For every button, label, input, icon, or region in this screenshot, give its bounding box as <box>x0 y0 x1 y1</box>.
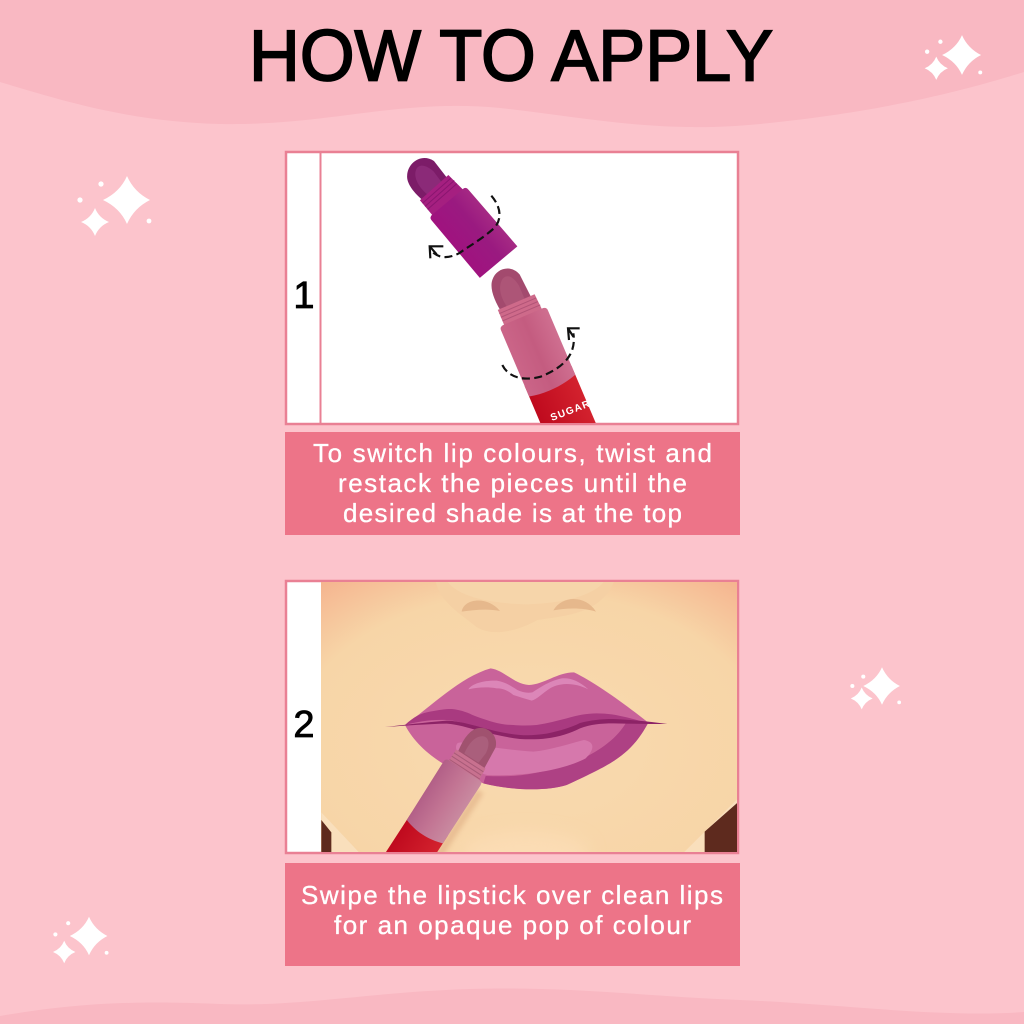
neck shadows <box>321 812 359 852</box>
arrow: top twist <box>430 196 500 258</box>
icon: sparkles right <box>850 667 901 709</box>
caption: step 2 <box>285 863 740 966</box>
step number 2: 2 <box>293 704 315 746</box>
lipstick in hand <box>386 728 496 852</box>
purple stacked piece <box>407 158 518 278</box>
step number 1: 1 <box>293 275 315 317</box>
icon: sparkles bottom left <box>53 917 109 963</box>
arrow: bottom twist <box>502 328 580 379</box>
rose stacked piece <box>492 268 596 423</box>
lips <box>385 668 667 789</box>
brand text on pencil: SUGAR <box>549 398 592 424</box>
caption: step 2: Swipe the lipstick over clean lips <box>301 880 723 910</box>
panel: step 1 <box>286 146 738 450</box>
title: HOW TO APPLY <box>249 16 773 96</box>
panel: step 2 <box>284 580 740 854</box>
illustration: lipstick pieces twisting <box>407 158 596 423</box>
bottom wave band <box>0 988 1024 1024</box>
illustration: face and lips <box>321 582 737 852</box>
caption: step 2: for an opaque pop of colour <box>334 910 691 940</box>
caption: step 1 <box>285 432 740 535</box>
nose <box>448 582 604 612</box>
top wave band <box>0 0 1024 127</box>
caption: step 1: desired shade is at the top <box>343 498 682 528</box>
chin highlight <box>474 840 578 852</box>
icon: sparkles top right <box>925 35 982 80</box>
caption: step 1: To switch lip colours, twist and <box>313 438 712 468</box>
caption: step 1: restack the pieces until the <box>338 468 687 498</box>
icon: sparkles left <box>77 176 151 236</box>
